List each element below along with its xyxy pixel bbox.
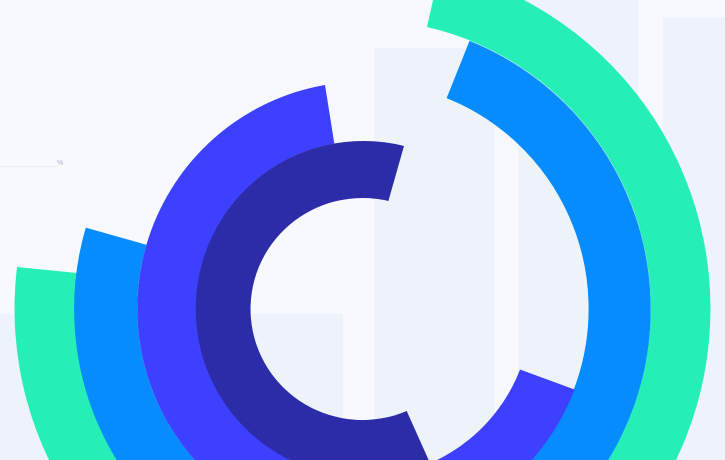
third ring: royal blue (137, 85, 574, 460)
inner ring: dark indigo (196, 141, 430, 460)
second ring: blue (74, 41, 650, 460)
faint axis tick and label: % (57, 160, 63, 167)
faint axis tick and label (0, 160, 63, 167)
